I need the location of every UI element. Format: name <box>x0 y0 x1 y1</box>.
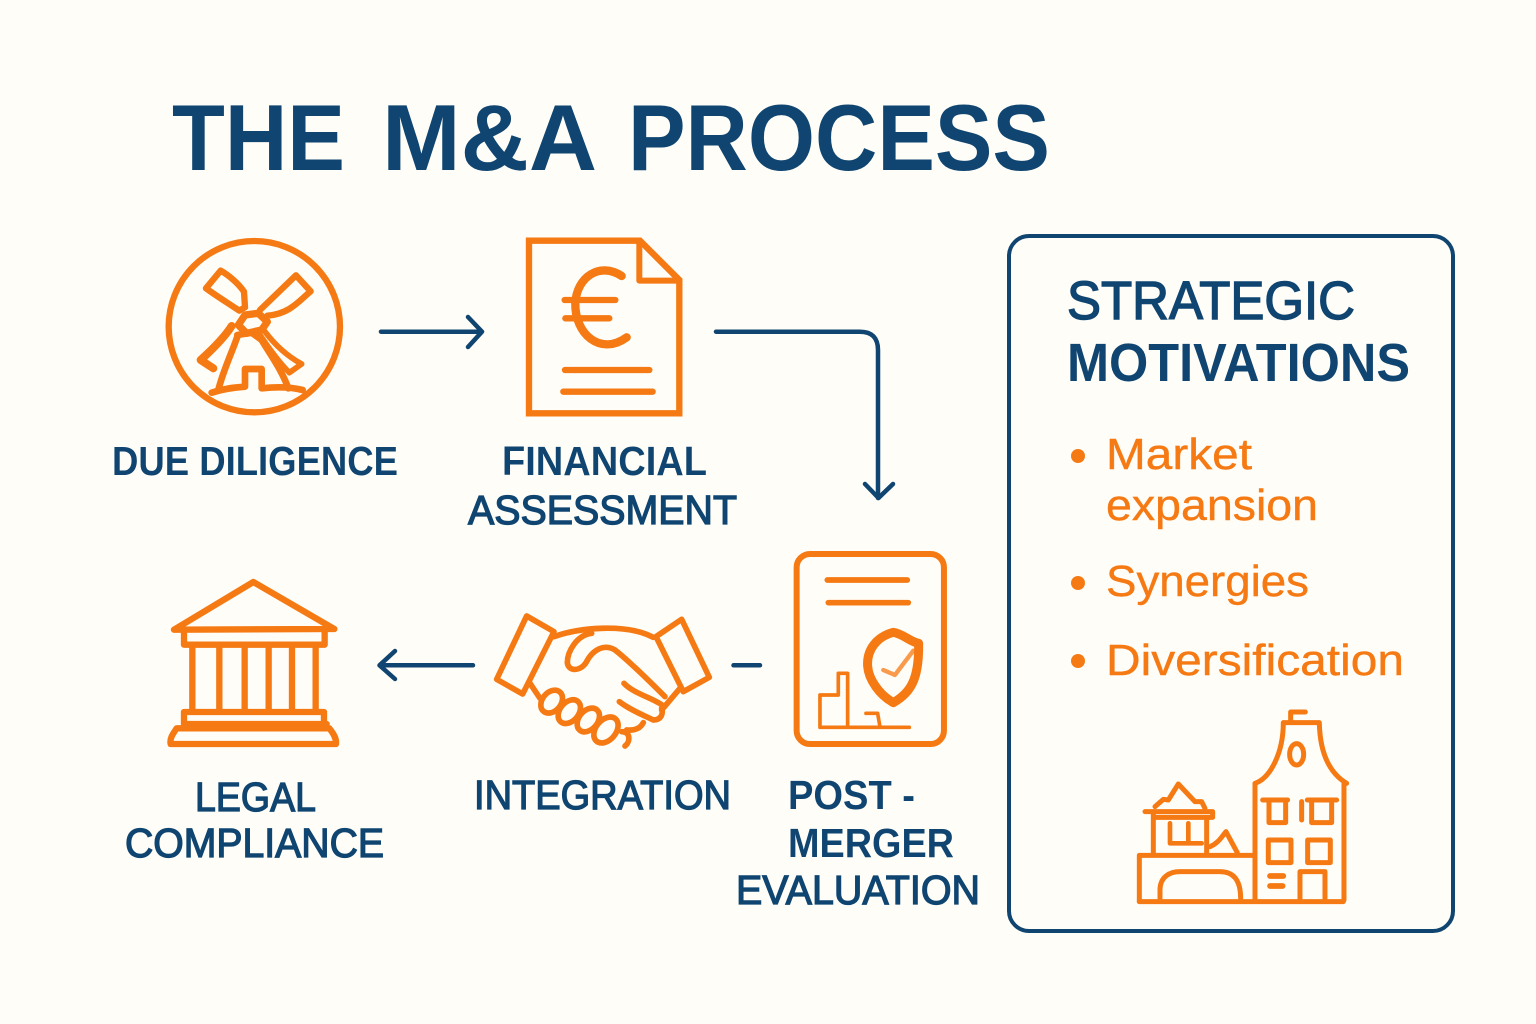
arrow: financial assessment to post-merger evaluation <box>716 332 893 498</box>
panel heading: STRATEGIC <box>1067 271 1355 331</box>
icon: classical building <box>170 582 336 744</box>
label: legal compliance: COMPLIANCE <box>125 820 384 866</box>
arrow: integration to legal compliance <box>380 651 473 679</box>
icon: certificate with shield <box>797 554 944 744</box>
label: legal compliance <box>125 774 384 866</box>
icon: dutch canal houses <box>1139 712 1347 902</box>
icon: handshake <box>497 616 709 748</box>
label: integration: INTEGRATION <box>474 772 731 818</box>
label: due diligence: DUE DILIGENCE <box>112 438 398 484</box>
connector: evaluation dash <box>734 663 760 668</box>
arrow: due diligence to financial assessment <box>381 317 482 347</box>
label: financial assessment: ASSESSMENT <box>468 487 737 533</box>
label: post-merger evaluation: POST - <box>788 772 915 818</box>
panel: strategic motivations <box>1009 236 1453 931</box>
bullet: diversification: Diversification <box>1106 636 1404 685</box>
title: PROCESS <box>628 85 1050 190</box>
title: M&A <box>382 85 597 190</box>
label: financial assessment <box>468 438 737 533</box>
label: financial assessment: FINANCIAL <box>502 438 707 484</box>
title: THE <box>172 85 345 190</box>
panel heading <box>1067 271 1410 393</box>
icon: euro document <box>529 241 679 413</box>
icon: windmill <box>169 241 340 412</box>
label: legal compliance: LEGAL <box>195 774 316 820</box>
label: post-merger evaluation <box>736 772 980 913</box>
bullet: market expansion: Market <box>1106 430 1252 479</box>
title <box>172 85 1050 190</box>
panel heading: MOTIVATIONS <box>1067 333 1410 393</box>
bullet: market expansion: expansion <box>1106 481 1318 530</box>
label: post-merger evaluation: EVALUATION <box>736 867 980 913</box>
bullet: synergies: Synergies <box>1106 557 1309 606</box>
label: post-merger evaluation: MERGER <box>788 820 954 866</box>
bullet: market expansion <box>1071 430 1318 530</box>
